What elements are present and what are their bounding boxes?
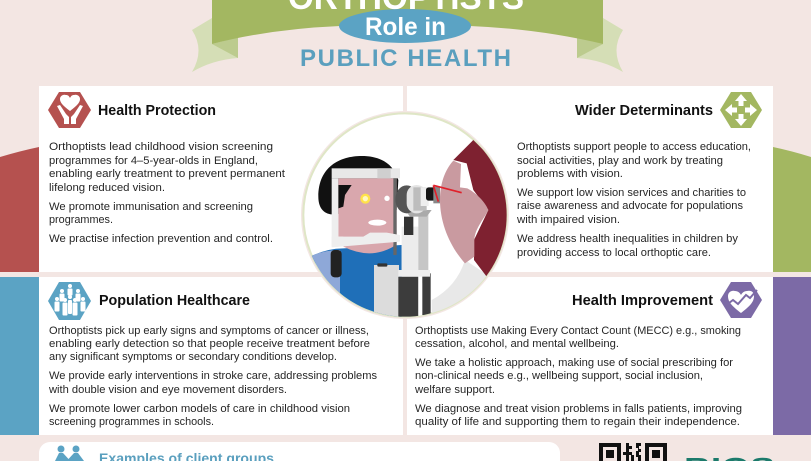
side band: purple xyxy=(773,277,811,435)
icon: heart with rising line xyxy=(720,282,762,318)
text block: Orthoptists support people to access education, xyxy=(517,141,751,153)
patient xyxy=(312,156,402,317)
text block: quality of life and supporting them to regain their independence. xyxy=(415,416,740,428)
text block: welfare support. xyxy=(414,384,495,396)
text block: cessation, alcohol, and mental wellbeing. xyxy=(415,338,619,350)
text block xyxy=(49,141,286,245)
panel: health protection xyxy=(39,86,403,272)
side band: blue xyxy=(0,277,39,435)
text block xyxy=(516,141,751,259)
text block: non-clinical needs e.g., wellbeing support, social inclusion, xyxy=(415,370,703,382)
central illustration: orthoptist examining a patient xyxy=(301,111,517,333)
text block: We support low vision services and charities to xyxy=(517,187,746,199)
text block: social activities, play and work by treating xyxy=(517,155,723,167)
text block: We promote immunisation and screening xyxy=(49,201,253,213)
orthoptist xyxy=(432,140,507,313)
title pill: role in xyxy=(339,9,471,43)
head frame xyxy=(331,168,400,277)
text block: screening programmes in schools. xyxy=(49,416,214,428)
text block: with impaired vision. xyxy=(516,214,620,226)
text block: We address health inequalities in children by xyxy=(517,233,738,245)
text block: programmes. xyxy=(49,214,113,226)
text block: any significant symptoms or secondary conditions develop. xyxy=(49,351,337,363)
panel: health improvement xyxy=(407,277,773,435)
icon: people xyxy=(55,446,84,461)
text block: lifelong reduced vision. xyxy=(49,182,165,194)
text block: We practise infection prevention and control. xyxy=(49,233,273,245)
text block: problems with vision. xyxy=(517,168,623,180)
slit lamp xyxy=(374,185,440,318)
text block: programmes for 4–5-year-olds in England, xyxy=(49,155,258,167)
text block: with double vision and eye movement disorders. xyxy=(48,384,287,396)
text block xyxy=(414,325,742,428)
panel: wider determinants xyxy=(407,86,773,272)
text block: Orthoptists pick up early signs and symptoms of cancer or illness, xyxy=(49,325,369,337)
panel: population healthcare xyxy=(39,277,403,435)
text block: Orthoptists lead childhood vision screening xyxy=(49,141,273,153)
title: public health: PUBLIC HEALTH xyxy=(300,45,511,72)
heading: Population Healthcare xyxy=(99,292,250,309)
text block: Orthoptists use Making Every Contact Count (MECC) e.g., smoking xyxy=(415,325,741,337)
text block: enabling early detection so that people receive treatment before xyxy=(49,338,370,350)
heading: Wider Determinants xyxy=(575,102,713,119)
icon: heart in hands xyxy=(48,92,91,128)
heading: Health Improvement xyxy=(572,292,713,309)
text block: We take a holistic approach, making use of social prescribing for xyxy=(415,357,733,369)
title pill: role in: Role in xyxy=(365,13,446,41)
text block: providing access to local orthoptic care. xyxy=(517,247,711,259)
text block: We provide early interventions in stroke care, addressing problems xyxy=(49,370,377,382)
QR code xyxy=(599,443,667,461)
text block xyxy=(48,325,377,428)
text block: We promote lower carbon models of care in childhood vision xyxy=(49,403,350,415)
side band: green xyxy=(773,147,811,272)
text block: enabling early treatment to prevent permanent xyxy=(49,168,286,180)
icon: four arrows xyxy=(720,92,762,128)
side band: red xyxy=(0,147,39,272)
heading: Health Protection xyxy=(98,102,216,119)
title banner xyxy=(192,0,623,72)
text block: raise awareness and advocate for populations xyxy=(517,200,743,212)
text block: We diagnose and treat vision problems in falls patients, improving xyxy=(415,403,742,415)
icon: group of people xyxy=(48,282,91,320)
panel: examples of client groups xyxy=(39,442,560,461)
